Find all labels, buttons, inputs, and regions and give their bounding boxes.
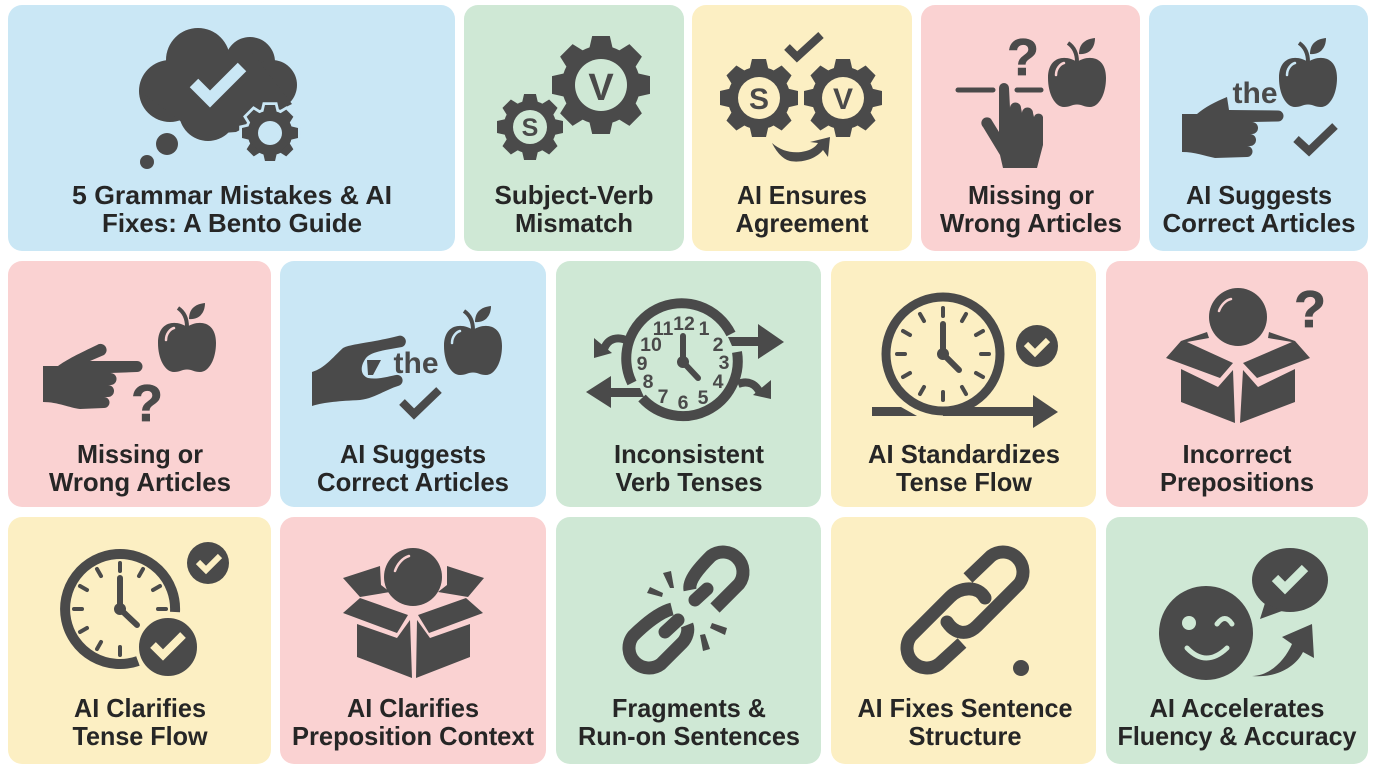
heading: 5 Grammar Mistakes & AI: [72, 180, 392, 210]
heading: Verb Tenses: [616, 467, 762, 497]
icon: mismatched gears S and V: [497, 36, 650, 160]
heading: AI Clarifies: [74, 693, 206, 723]
heading: Preposition Context: [292, 721, 534, 751]
heading: Tense Flow: [896, 467, 1033, 497]
heading: Missing or: [968, 180, 1094, 210]
heading: AI Ensures: [737, 180, 867, 210]
heading: AI Accelerates: [1150, 693, 1324, 723]
icon: ball above open box with question mark: [1166, 281, 1326, 423]
icon: hand pointing at the apple: the: [1232, 77, 1278, 110]
heading: Fixes: A Bento Guide: [102, 208, 362, 238]
icon: mismatched gears S and V: V: [588, 67, 614, 109]
heading: AI Clarifies: [347, 693, 479, 723]
icon: hand pointing, question mark and apple: ?: [131, 375, 163, 433]
heading: AI Suggests: [340, 439, 486, 469]
icon: hand placing the before apple: [312, 306, 502, 414]
heading: Fluency & Accuracy: [1118, 721, 1357, 751]
icon: hand pointing, question mark and apple: [43, 303, 216, 433]
heading: Wrong Articles: [49, 467, 231, 497]
panel: AI ensures agreement: [692, 5, 912, 251]
icon: mismatched gears S and V: S: [522, 114, 538, 142]
icon: pointing-up hand, blank, question mark and apple: ?: [1007, 29, 1039, 87]
panel: incorrect prepositions: [1106, 261, 1368, 507]
heading: Fragments &: [612, 693, 766, 723]
panel: AI accelerates fluency and accuracy: [1106, 517, 1368, 764]
icon: numbered clock with diverging arrows: 1: [699, 318, 710, 340]
heading: Structure: [908, 721, 1022, 751]
icon: ball above open box with question mark: ?: [1294, 281, 1326, 339]
heading: Mismatch: [515, 208, 633, 238]
heading: AI Standardizes: [868, 439, 1060, 469]
icon: numbered clock with diverging arrows: [586, 303, 784, 416]
icon: numbered clock with diverging arrows: 2: [713, 334, 724, 356]
panel: title card: [8, 5, 455, 251]
icon: broken chain link: [629, 552, 743, 668]
icon: numbered clock with diverging arrows: 7: [658, 386, 668, 408]
heading: Subject-Verb: [494, 180, 654, 210]
panel: missing or wrong articles: [921, 5, 1140, 251]
icon: numbered clock with diverging arrows: 12: [673, 313, 695, 335]
heading: Wrong Articles: [940, 208, 1122, 238]
panel: AI suggests correct articles, row two: [280, 261, 546, 507]
panel: AI fixes sentence structure: [831, 517, 1096, 764]
heading: Incorrect: [1182, 439, 1292, 469]
heading: AI Suggests: [1186, 180, 1332, 210]
heading: Inconsistent: [614, 439, 764, 469]
heading: Correct Articles: [317, 467, 509, 497]
panel: fragments and run-on sentences: [556, 517, 821, 764]
panel: AI suggests correct articles: [1149, 5, 1368, 251]
icon: hand pointing at the apple: [1182, 38, 1337, 158]
panel: AI clarifies preposition context: [280, 517, 546, 764]
icon: numbered clock with diverging arrows: 9: [637, 353, 648, 375]
heading: Run-on Sentences: [578, 721, 800, 751]
heading: Prepositions: [1160, 467, 1314, 497]
icon: aligned gears with check and arrow: [720, 35, 882, 162]
heading: Correct Articles: [1162, 208, 1356, 238]
icon: numbered clock with diverging arrows: 11: [653, 318, 673, 340]
panel: subject-verb mismatch: [464, 5, 684, 251]
icon: numbered clock with diverging arrows: 4: [713, 371, 724, 393]
icon: aligned gears with check and arrow: S: [749, 83, 769, 116]
icon: winking face, speech bubble and rising arrow: [1159, 548, 1328, 680]
icon: numbered clock with diverging arrows: 10: [640, 334, 662, 356]
icon: numbered clock with diverging arrows: 6: [678, 392, 689, 414]
panel: AI clarifies tense flow: [8, 517, 271, 764]
icon: thought cloud with check and gear: [139, 28, 298, 169]
icon: numbered clock with diverging arrows: 8: [643, 371, 654, 393]
heading: Tense Flow: [72, 721, 208, 751]
icon: pointing-up hand, blank, question mark and apple: [958, 29, 1106, 168]
panel: inconsistent verb tenses: [556, 261, 821, 507]
icon: joined chain link with period: [907, 552, 1029, 676]
icon: numbered clock with diverging arrows: 5: [698, 387, 709, 409]
heading: AI Fixes Sentence: [858, 693, 1072, 723]
panel: AI standardizes tense flow: [831, 261, 1096, 507]
heading: Missing or: [77, 439, 203, 469]
icon: clock rolling on arrow with check badge: [872, 297, 1058, 428]
icon: clock with two check badges: [65, 542, 229, 678]
icon: hand placing the before apple: the: [394, 347, 438, 380]
icon: numbered clock with diverging arrows: 3: [719, 352, 730, 374]
heading: Agreement: [736, 208, 869, 238]
panel: missing or wrong articles, row two: [8, 261, 271, 507]
icon: aligned gears with check and arrow: V: [833, 83, 853, 116]
icon: ball inside open box: [343, 548, 484, 678]
